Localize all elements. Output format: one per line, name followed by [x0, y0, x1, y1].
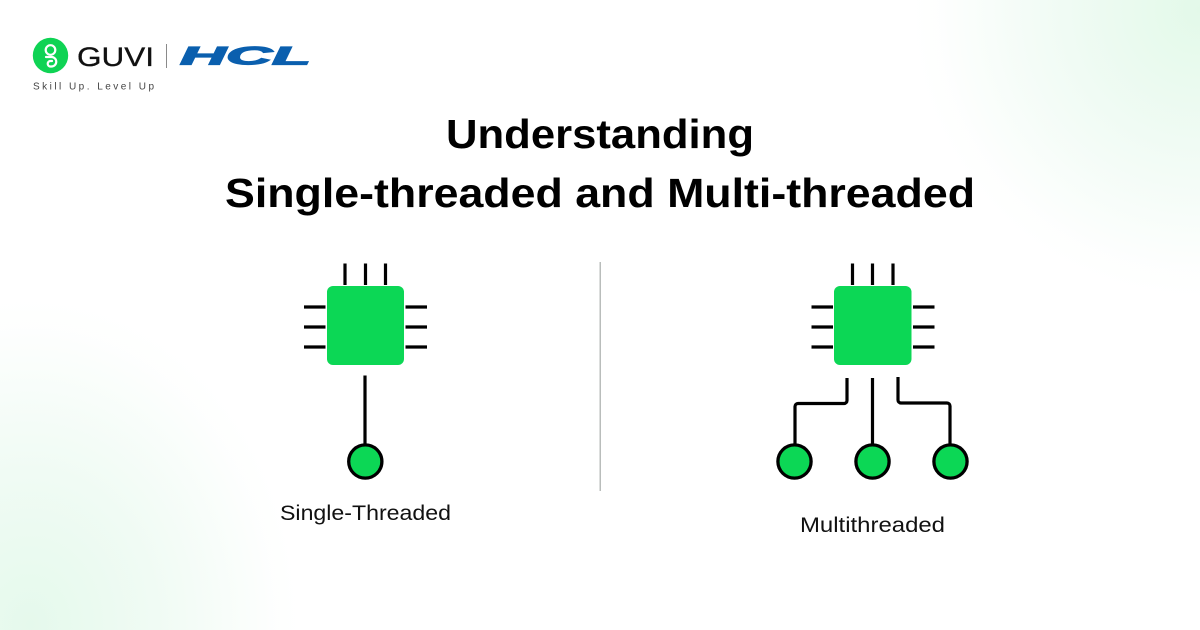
title: Understanding	[446, 111, 754, 157]
icon: GUVI green circle	[33, 38, 68, 73]
label: Multithreaded: Multithreaded	[800, 514, 945, 537]
tagline: Skill Up. Level Up	[33, 82, 154, 92]
thread nodes	[778, 445, 967, 478]
thread line	[363, 376, 367, 445]
thread node	[349, 445, 382, 478]
central divider	[600, 262, 601, 491]
icon: CPU chip	[812, 264, 934, 365]
title: Single-threaded and Multi-threaded	[225, 170, 975, 216]
title	[225, 111, 975, 216]
icon: CPU chip	[304, 264, 427, 365]
logo: GUVI and HCL	[33, 38, 311, 92]
panel: multithreaded	[778, 264, 967, 537]
panel: single-threaded	[280, 264, 451, 525]
GUVI wordmark: GUVI	[77, 42, 154, 72]
HCL wordmark: HCL	[180, 42, 311, 70]
thread lines	[795, 377, 950, 445]
label: Single-Threaded: Single-Threaded	[280, 502, 451, 525]
logo divider	[166, 44, 167, 68]
